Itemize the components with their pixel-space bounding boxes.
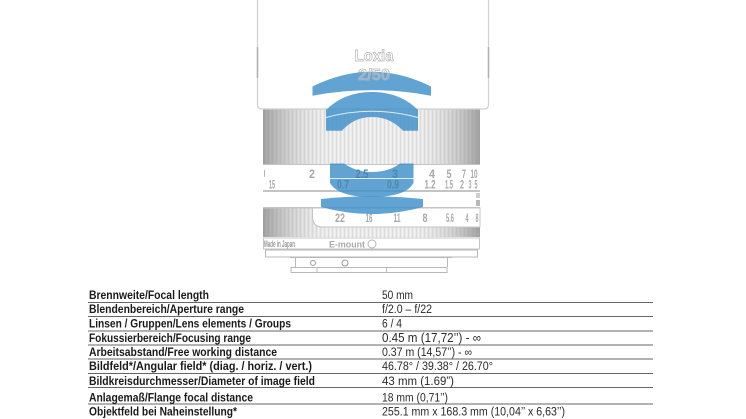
lens diagram bbox=[258, 0, 488, 273]
distance scale band: 2 bbox=[460, 180, 464, 192]
labels: Objektfeld bei Naheinstellung* bbox=[89, 406, 237, 418]
values: 18 mm (0,71’’) bbox=[382, 392, 448, 404]
labels: Blendenbereich/Aperture range bbox=[89, 304, 244, 316]
row dividers bbox=[88, 302, 653, 404]
distance scale band: 3 bbox=[468, 180, 472, 192]
values bbox=[382, 290, 565, 418]
spec table bbox=[88, 290, 653, 418]
knurled focus ring bbox=[263, 109, 480, 165]
element 3 bbox=[330, 164, 414, 197]
distance scale band: 15 bbox=[269, 180, 275, 192]
values: 0.37 m (14,57’’) - ∞ bbox=[382, 347, 472, 359]
distance scale band: 4 bbox=[429, 169, 436, 181]
labels: Bildfeld*/Angular field* (diag. / horiz. / vert.) bbox=[89, 361, 312, 373]
aperture ring: 4 bbox=[466, 213, 469, 225]
aperture ring: 8 bbox=[422, 213, 428, 225]
element 3 join line bbox=[330, 178, 414, 180]
distance scale band: 1.5 bbox=[445, 180, 453, 192]
element 1 bbox=[312, 72, 431, 96]
labels: Brennweite/Focal length bbox=[89, 290, 209, 302]
aperture ring: 22 bbox=[335, 213, 345, 225]
optical elements bbox=[312, 72, 431, 214]
labels: Arbeitsabstand/Free working distance bbox=[89, 347, 277, 359]
values: 6 / 4 bbox=[382, 318, 403, 330]
distance scale band: 2 bbox=[309, 169, 315, 181]
values: 46.78° / 39.38° / 26.70° bbox=[382, 361, 493, 373]
labels: Anlagemaß/Flange focal distance bbox=[89, 392, 253, 404]
aperture ring: 8 bbox=[476, 213, 479, 225]
scale numbers seen through the glass: 0.7 bbox=[337, 180, 349, 192]
plain white band bbox=[263, 192, 480, 208]
mount band with markings: E-mount bbox=[329, 240, 366, 250]
scale numbers seen through the glass: 0.9 bbox=[387, 180, 399, 192]
distance scale band: 5 bbox=[446, 169, 452, 181]
aperture ring bbox=[263, 207, 480, 237]
distance scale band: 1.2 bbox=[424, 180, 436, 192]
distance scale band: 10 bbox=[470, 169, 478, 181]
labels: Linsen / Gruppen/Lens elements / Groups bbox=[89, 318, 291, 330]
aperture ring: 5.6 bbox=[446, 213, 454, 225]
element 2 bbox=[326, 92, 418, 131]
Loxia model label: 2/50 bbox=[358, 67, 390, 84]
aperture ring: 16 bbox=[366, 213, 372, 225]
lens mount base bbox=[266, 250, 478, 273]
aperture ring: 11 bbox=[394, 213, 401, 225]
labels: Bildkreisdurchmesser/Diameter of image field bbox=[89, 376, 315, 388]
values: 255.1 mm x 168.3 mm (10,04’’ x 6,63’’) bbox=[382, 406, 565, 418]
lens hood bbox=[258, 0, 488, 109]
scale numbers seen through the glass: 2.5 bbox=[356, 169, 369, 181]
labels bbox=[89, 290, 315, 418]
distance scale band: 7 bbox=[462, 169, 466, 181]
values: f/2.0 – f/22 bbox=[382, 304, 432, 316]
mount band with markings: Made in Japan bbox=[264, 239, 295, 249]
mount band with markings bbox=[264, 238, 480, 250]
labels: Fokussierbereich/Focusing range bbox=[89, 333, 251, 345]
Loxia model label bbox=[354, 48, 394, 84]
scale numbers seen through the glass bbox=[337, 169, 399, 192]
distance scale band: 5 bbox=[474, 180, 478, 192]
values: 43 mm (1.69”) bbox=[382, 376, 454, 388]
Loxia model label: Loxia bbox=[354, 48, 394, 65]
scale numbers seen through the glass: 3 bbox=[392, 169, 398, 181]
element 2 join line bbox=[326, 111, 418, 118]
distance scale band bbox=[263, 164, 480, 192]
element 4 bbox=[321, 196, 423, 214]
values: 50 mm bbox=[382, 290, 413, 302]
values: 0.45 m (17,72’’) - ∞ bbox=[382, 331, 481, 345]
